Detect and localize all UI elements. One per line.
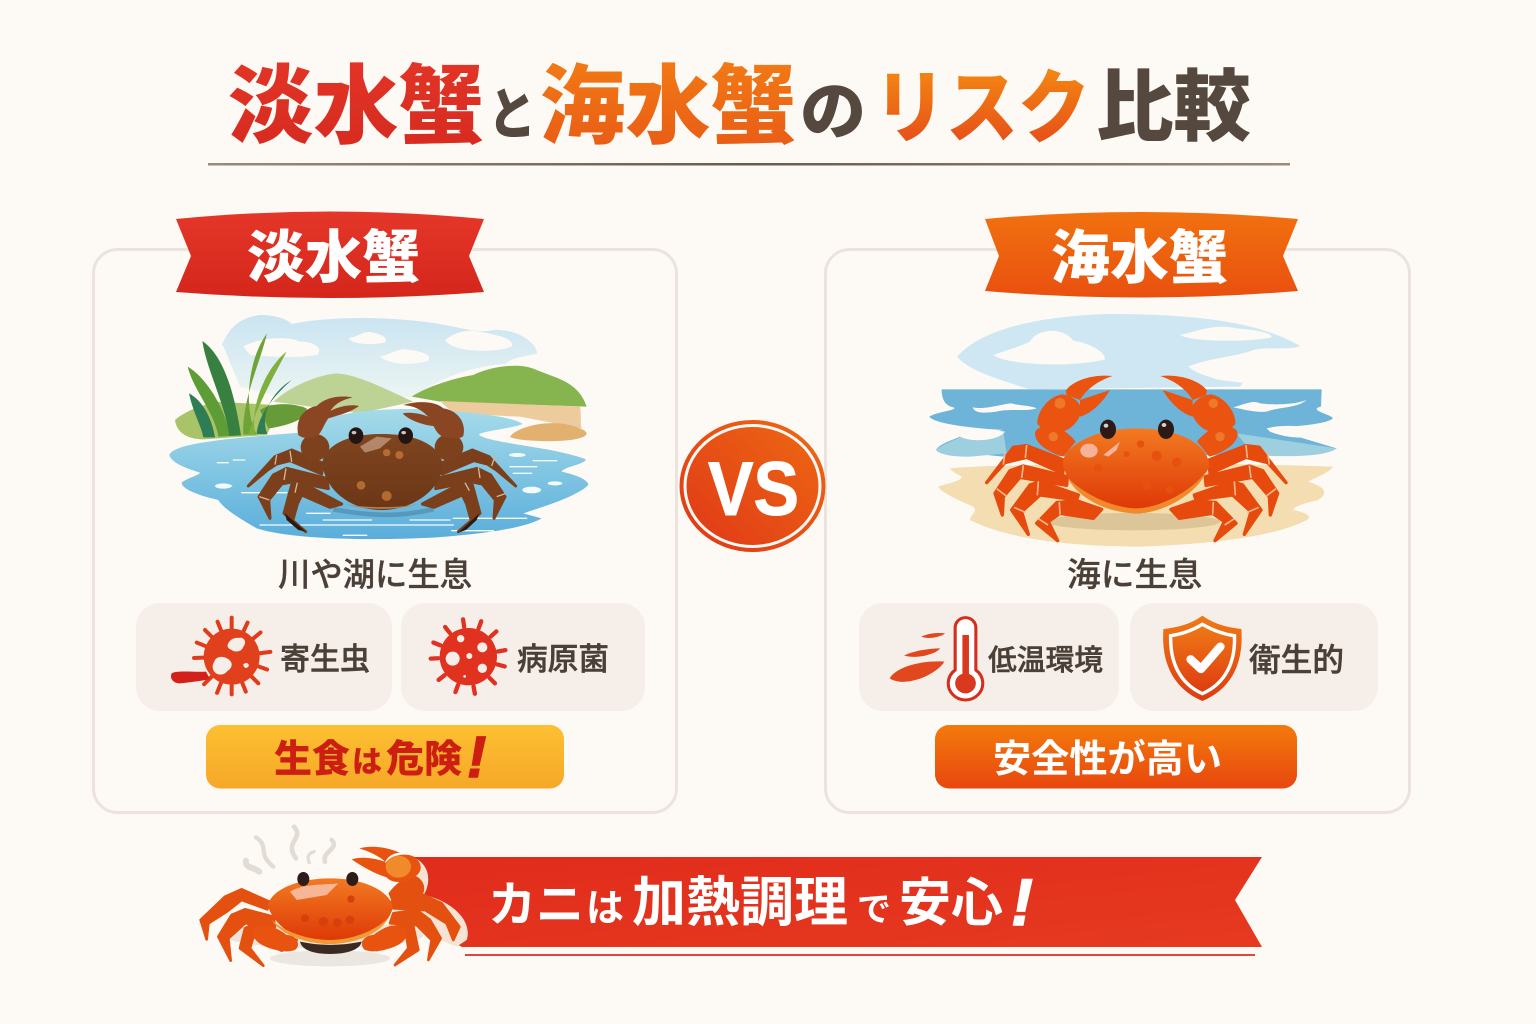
ribbon: saltwater crab bbox=[985, 212, 1298, 298]
banner text: ! bbox=[1011, 865, 1033, 939]
title: 海水蟹 bbox=[540, 59, 796, 155]
brown crab bbox=[248, 396, 516, 533]
chip: hygienic bbox=[1130, 603, 1378, 711]
label: parasite: 寄生虫 bbox=[280, 642, 370, 677]
banner text: 加熱調理 bbox=[632, 873, 848, 933]
title: リスク bbox=[874, 64, 1090, 153]
banner text: で bbox=[857, 891, 891, 929]
icon: parasite bbox=[171, 618, 270, 694]
bottom banner bbox=[410, 857, 1262, 956]
label: habitat rivers and lakes: 川や湖に生息 bbox=[278, 556, 472, 593]
title: 淡水蟹 bbox=[228, 59, 484, 155]
hills bbox=[273, 373, 413, 413]
ribbon: freshwater crab bbox=[176, 212, 484, 298]
label: habitat sea: 海に生息 bbox=[1067, 556, 1202, 593]
chip: low temperature bbox=[859, 603, 1119, 711]
button: high safety: 安全性が高い bbox=[993, 739, 1222, 781]
icon: pathogen bbox=[431, 619, 505, 694]
VS badge: VS bbox=[708, 447, 799, 532]
sea bbox=[929, 389, 1337, 457]
banner text: 安心 bbox=[899, 875, 1003, 933]
title: の bbox=[800, 76, 866, 148]
banner text: は bbox=[586, 888, 624, 930]
illustration: beach scene with orange crab bbox=[929, 314, 1337, 547]
illustration: cooked crab with steam bbox=[201, 827, 468, 966]
title: と bbox=[488, 83, 536, 146]
legs bbox=[201, 889, 459, 966]
chip: pathogen bbox=[401, 603, 645, 711]
button: raw food is dangerous bbox=[206, 725, 564, 790]
illustration: river scene with brown crab bbox=[169, 315, 588, 539]
label: hygienic: 衛生的 bbox=[1249, 642, 1344, 678]
reeds bbox=[188, 333, 292, 437]
ribbon: saltwater crab: 海水蟹 bbox=[1051, 226, 1228, 291]
icon: thermometer bbox=[890, 618, 983, 700]
label: low temperature environment: 低温環境 bbox=[988, 644, 1103, 677]
button: high safety bbox=[935, 725, 1297, 788]
button: raw food is dangerous: は bbox=[352, 746, 382, 779]
panel: saltwater crab bbox=[826, 212, 1410, 812]
water highlights bbox=[215, 453, 562, 535]
label: pathogen: 病原菌 bbox=[517, 642, 609, 677]
sand bbox=[938, 463, 1333, 547]
halo behind claw bbox=[390, 856, 468, 947]
title underline bbox=[208, 163, 1290, 166]
banner text bbox=[488, 865, 1033, 939]
icon: shield with check bbox=[1163, 616, 1242, 701]
button: raw food is dangerous: 生食 bbox=[274, 739, 350, 781]
VS badge bbox=[680, 420, 826, 552]
button: raw food is dangerous: 危険 bbox=[386, 739, 462, 781]
orange crab bbox=[987, 376, 1286, 541]
title bbox=[228, 59, 1251, 155]
raised claw bbox=[352, 847, 424, 906]
title: 比較 bbox=[1096, 63, 1251, 151]
banner text: カニ bbox=[488, 879, 584, 932]
panel: freshwater crab bbox=[94, 212, 676, 812]
water bbox=[169, 409, 588, 539]
button: raw food is dangerous: ! bbox=[467, 725, 486, 790]
ribbon: freshwater crab: 淡水蟹 bbox=[247, 226, 420, 290]
steam bbox=[246, 827, 334, 872]
chip: parasite bbox=[136, 603, 392, 711]
